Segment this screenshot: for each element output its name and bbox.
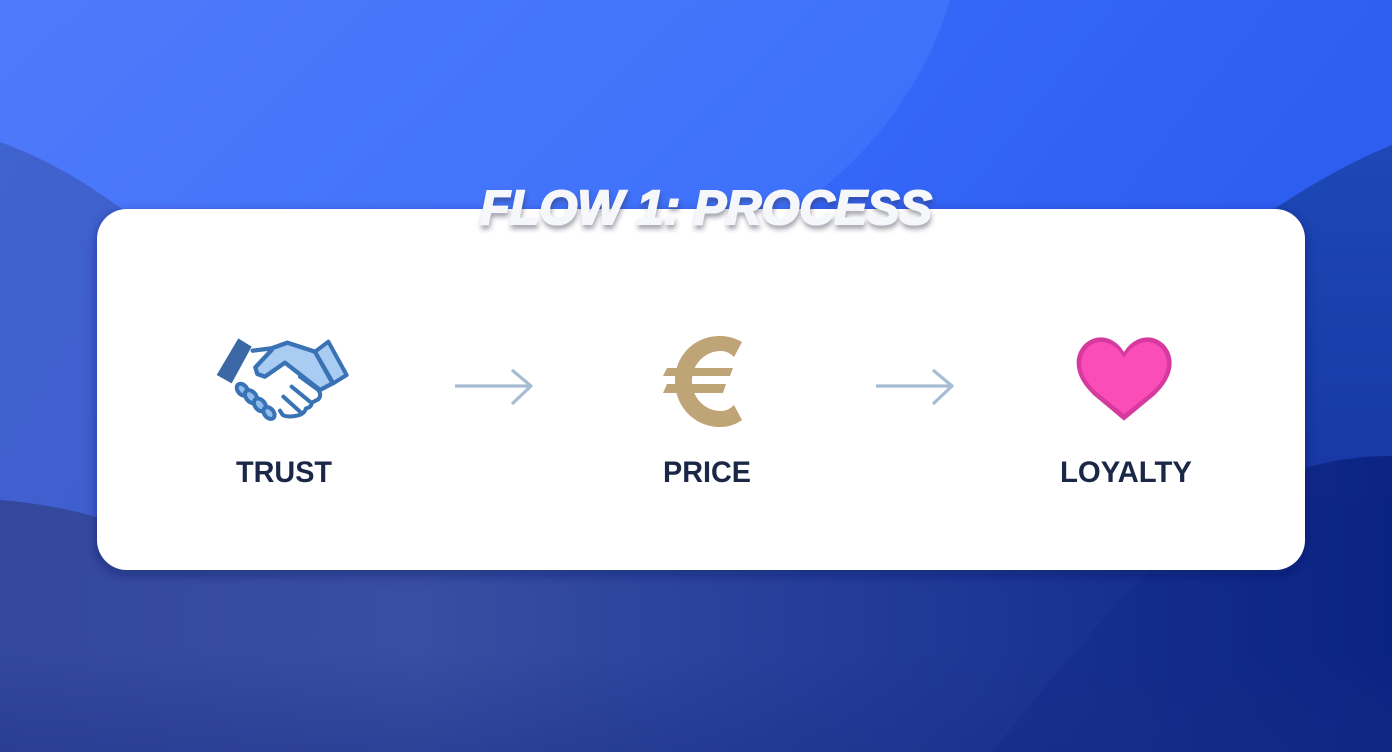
label: loyalty: LOYALTY bbox=[1060, 456, 1192, 489]
icon: handshake bbox=[217, 338, 347, 421]
title: FLOW 1: PROCESS bbox=[480, 182, 932, 235]
label: trust: TRUST bbox=[236, 456, 332, 489]
icon: heart bbox=[1077, 337, 1172, 421]
label: price: PRICE bbox=[663, 456, 751, 489]
panel: process card bbox=[97, 209, 1305, 570]
fingers bbox=[234, 382, 277, 421]
white lower hand bbox=[242, 349, 321, 417]
upper hand bbox=[253, 343, 333, 390]
finger lines bbox=[280, 377, 320, 416]
left cuff bbox=[217, 338, 252, 383]
icon: euro bbox=[663, 336, 742, 427]
arrow: trust to price bbox=[455, 370, 531, 404]
right cuff bbox=[315, 342, 347, 383]
arrow: price to loyalty bbox=[876, 370, 952, 404]
